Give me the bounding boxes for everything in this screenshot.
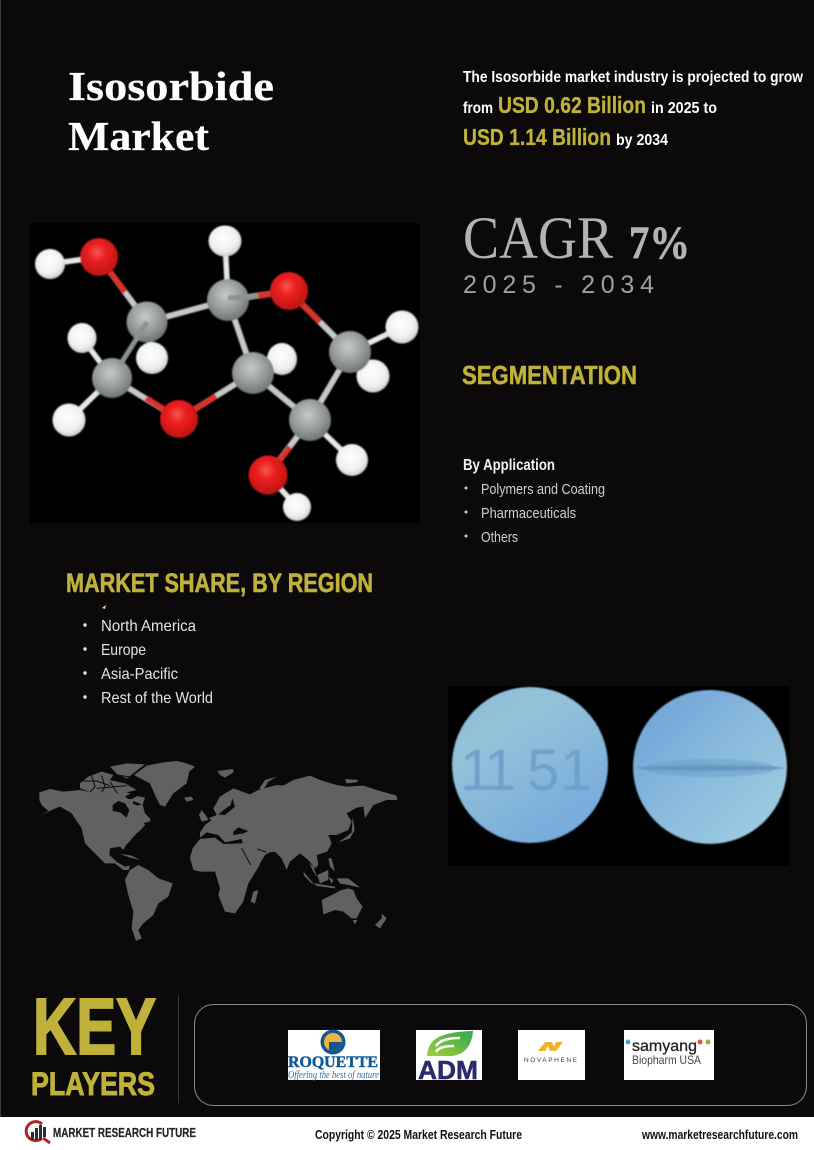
logo: Roquette: ROQUETTE	[288, 1054, 378, 1071]
heading: segmentation: SEGMENTATION	[462, 360, 637, 390]
hydrogen atoms	[35, 226, 418, 521]
tablet: imprint side: 1151	[460, 738, 592, 803]
text block: market projection: from	[463, 100, 493, 117]
logo: ADM	[416, 1030, 482, 1085]
CAGR stat: CAGR	[463, 205, 613, 271]
CAGR stat	[463, 205, 690, 299]
carbon atoms	[92, 279, 371, 441]
text block: market projection	[463, 69, 803, 150]
map: Canada and Caribbean cutouts	[110, 793, 151, 866]
title	[68, 63, 274, 159]
logo: Novaphene	[518, 1030, 585, 1080]
logo: ADM: ADM	[418, 1055, 478, 1085]
text block: market projection: in 2025 to	[651, 100, 717, 117]
heading: key players: PLAYERS	[31, 1066, 155, 1102]
map: Americas and Greenland	[39, 761, 195, 941]
heading: key players	[31, 982, 156, 1102]
logo: Samyang	[624, 1030, 714, 1080]
list: regions	[83, 618, 213, 707]
map: seas cutouts	[198, 798, 248, 844]
text block: market projection: by 2034	[616, 132, 668, 149]
heading: key players: KEY	[33, 982, 156, 1071]
list: regions: Rest of the World	[101, 690, 213, 707]
logo: Samyang: samyang	[632, 1038, 697, 1055]
list: by application: Pharmaceuticals	[481, 505, 576, 522]
tablet: imprint side	[452, 687, 608, 843]
title: Market	[68, 113, 209, 159]
list: regions: Europe	[101, 642, 146, 659]
CAGR stat: 2025 - 2034	[463, 271, 654, 299]
footer	[0, 1117, 814, 1150]
text block: market projection: USD 1.14 Billion	[463, 124, 611, 150]
icon: market research future logo	[26, 1122, 50, 1143]
panel: tablets image	[448, 686, 790, 866]
molecule bonds	[50, 241, 402, 507]
map: Eurasia, Africa and Oceania	[190, 769, 397, 928]
panel: molecule image	[30, 223, 420, 523]
list: by application: Others	[481, 529, 518, 546]
list: by application: Polymers and Coating	[481, 481, 605, 498]
logo: Novaphene: NOVAPHENE	[524, 1057, 578, 1064]
heading: market share by region: MARKET SHARE, BY REGION	[66, 568, 373, 598]
CAGR stat: 7%	[629, 217, 690, 269]
panel: key players logos	[194, 1004, 806, 1106]
footer: MARKET RESEARCH FUTURE	[53, 1125, 196, 1140]
text block: market projection: USD 0.62 Billion	[498, 92, 646, 118]
oxygen atoms	[80, 238, 308, 494]
list: by application: By Application	[463, 457, 555, 474]
logo: Roquette	[288, 1030, 380, 1081]
footer: Copyright © 2025 Market Research Future	[315, 1127, 522, 1142]
tablet: scored side	[633, 690, 787, 844]
world map	[39, 761, 397, 941]
title: Isosorbide	[68, 63, 274, 109]
list: by application	[463, 457, 605, 546]
logo: Samyang: Biopharm USA	[632, 1053, 701, 1067]
logo: Roquette: Offering the best of nature	[288, 1070, 379, 1081]
list: regions: Asia-Pacific	[101, 666, 178, 683]
list: regions: North America	[101, 618, 196, 635]
